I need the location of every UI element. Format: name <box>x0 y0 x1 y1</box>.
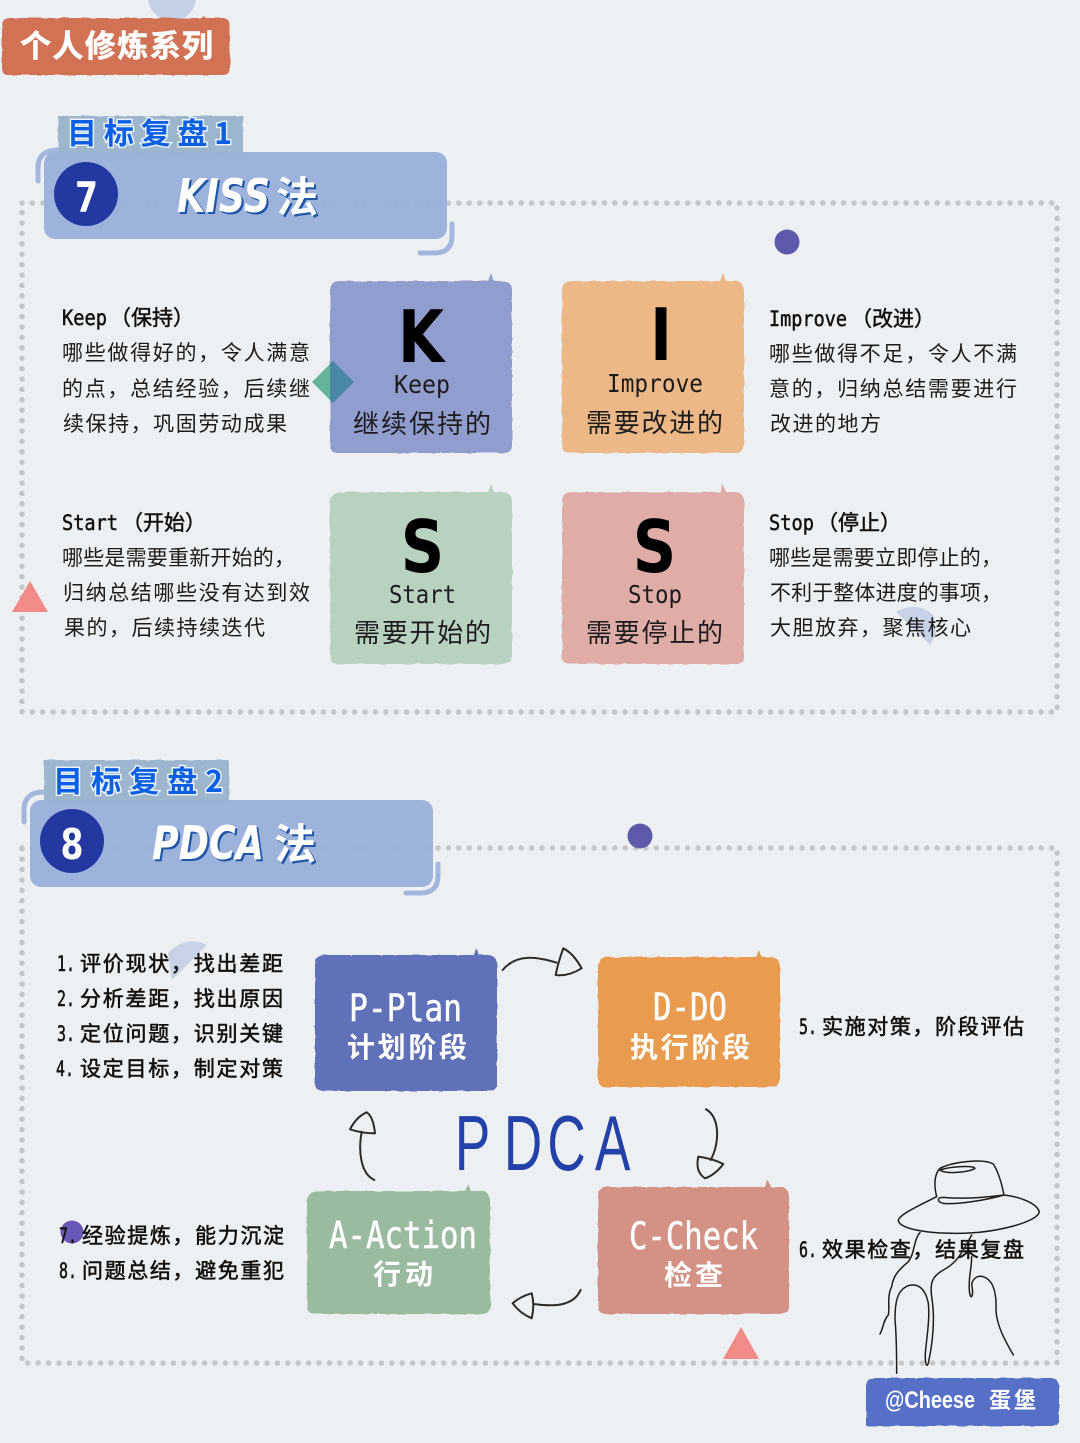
text block: Keep: Keep <box>62 306 107 330</box>
text block: steps 1-4: 4. <box>56 1057 74 1081</box>
text block: Keep: （保持） <box>110 306 194 330</box>
decorative dot <box>60 1220 84 1244</box>
text block: Stop: 大胆放弃，聚焦核心 <box>770 616 971 640</box>
number badge 7: 7 <box>75 173 98 222</box>
text block: Start: （开始） <box>122 511 206 535</box>
title tag: 个人修炼系列 <box>20 29 213 64</box>
text block: Keep <box>62 306 310 436</box>
text block: steps 1-4: 分析差距，找出原因 <box>80 987 283 1011</box>
tag: goal review 2: 目标复盘2 <box>53 757 223 801</box>
decorative top circle <box>148 0 196 21</box>
number badge 8: 8 <box>60 820 84 869</box>
section header: PDCA <box>24 757 438 893</box>
number badge 7 <box>54 162 118 226</box>
text block: steps 7-8: 经验提炼，能力沉淀 <box>82 1224 284 1248</box>
signature badge: 蛋堡 <box>989 1388 1036 1413</box>
illustration: woman in hat <box>880 1161 1039 1373</box>
card: S Stop <box>562 484 744 664</box>
text block: Improve: 改进的地方 <box>770 412 881 436</box>
text block: steps 7-8: 8. <box>59 1259 77 1283</box>
text block: Start: 哪些是需要重新开始的， <box>62 546 295 570</box>
text block: Improve <box>769 307 1017 436</box>
number badge 8 <box>40 809 104 873</box>
panel frame: KISS <box>22 203 1057 712</box>
text block: Improve: （改进） <box>851 307 935 331</box>
card: A-Action: 行动 <box>373 1253 433 1293</box>
card: I Improve: I <box>650 293 672 377</box>
text block: Stop: 不利于整体进度的事项， <box>770 581 1002 605</box>
card: C-Check: 检查 <box>664 1254 723 1294</box>
card: S Start: S <box>401 505 444 589</box>
card: D-DO <box>598 950 780 1087</box>
title tag <box>2 15 230 75</box>
card: S Stop: S <box>633 505 676 589</box>
text block: Improve: Improve <box>769 307 847 331</box>
text block: Keep: 续保持，巩固劳动成果 <box>63 412 287 436</box>
heading: PDCA: 法 <box>274 820 316 869</box>
arrow: action to plan <box>350 1112 375 1180</box>
card: I Improve: 需要改进的 <box>586 403 723 440</box>
text block: steps 1-4: 3. <box>57 1022 75 1046</box>
icon: diamond <box>312 361 354 403</box>
text block: steps 7-8: 7. <box>59 1224 77 1248</box>
text block: steps 7-8: 问题总结，避免重犯 <box>82 1259 284 1283</box>
card: S Start: Start <box>389 580 456 609</box>
text block: steps 1-4: 设定目标，制定对策 <box>80 1057 283 1081</box>
card: I Improve <box>562 273 744 453</box>
text block: Keep: 哪些做得好的，令人满意 <box>62 341 310 365</box>
card: K Keep: Keep <box>394 370 450 399</box>
card: A-Action <box>307 1184 490 1314</box>
text block: step 5: 实施对策，阶段评估 <box>822 1015 1024 1039</box>
signature badge: @Cheese <box>885 1387 975 1414</box>
tag: goal review 1: 目标复盘1 <box>67 109 232 153</box>
decorative dot <box>628 824 652 848</box>
heading: KISS: KISS <box>177 169 270 223</box>
arrow: plan to do <box>503 948 582 975</box>
text block: Start: 果的，后续持续迭代 <box>64 616 265 640</box>
heading: KISS: 法 <box>276 173 318 222</box>
text block: steps 1-4 <box>56 952 283 1081</box>
card: A-Action: A-Action <box>329 1214 477 1257</box>
card: S Stop: Stop <box>628 580 682 609</box>
icon: triangle <box>12 581 48 612</box>
decorative dot <box>774 230 800 254</box>
card: C-Check <box>598 1180 789 1314</box>
text block: Start <box>62 511 310 640</box>
card: P-Plan <box>315 948 497 1091</box>
text block: steps 1-4: 评价现状，找出差距 <box>80 952 283 976</box>
text block: steps 1-4: 1. <box>57 952 75 976</box>
card: K Keep <box>330 273 512 453</box>
text block: Improve: 哪些做得不足，令人不满 <box>769 342 1017 366</box>
signature badge <box>866 1378 1059 1426</box>
decorative fan <box>896 607 936 645</box>
arrow: do to check <box>697 1109 723 1178</box>
text block: Stop: （停止） <box>817 511 901 535</box>
card: S Stop: 需要停止的 <box>586 613 723 650</box>
icon: triangle <box>723 1327 759 1359</box>
text block: Start: Start <box>62 511 118 535</box>
text block: Keep: 的点，总结经验，后续继 <box>62 377 310 401</box>
heading: PDCA center: PDCA <box>455 1101 631 1188</box>
text block: Stop <box>769 511 1002 640</box>
section header: KISS <box>38 109 452 253</box>
text block: steps 1-4: 定位问题，识别关键 <box>80 1022 283 1046</box>
card: K Keep: 继续保持的 <box>353 404 491 441</box>
text block: Start: 归纳总结哪些没有达到效 <box>63 581 310 605</box>
card: P-Plan: P-Plan <box>349 987 462 1030</box>
card: S Start <box>330 484 512 664</box>
card: D-DO: D-DO <box>653 986 727 1029</box>
text block: steps 1-4: 2. <box>57 987 75 1011</box>
card: K Keep: K <box>398 295 446 379</box>
text block: steps 7-8 <box>59 1224 284 1283</box>
text block: Stop: 哪些是需要立即停止的， <box>769 546 1002 570</box>
panel frame: PDCA <box>22 848 1057 1363</box>
card: C-Check: C-Check <box>629 1215 758 1258</box>
text block: Improve: 意的，归纳总结需要进行 <box>769 377 1017 401</box>
text block: Stop: Stop <box>769 511 814 535</box>
text block: step 5: 5. <box>799 1015 817 1039</box>
text block: step 6: 效果检查，结果复盘 <box>822 1238 1024 1262</box>
arrow: check to action <box>513 1290 581 1318</box>
heading: PDCA: PDCA <box>152 816 264 870</box>
text block: step 6: 6. <box>799 1238 817 1262</box>
card: I Improve: Improve <box>607 369 703 398</box>
card: D-DO: 执行阶段 <box>630 1026 750 1066</box>
card: S Start: 需要开始的 <box>354 613 491 650</box>
decorative fan <box>168 941 207 980</box>
card: P-Plan: 计划阶段 <box>347 1026 467 1066</box>
